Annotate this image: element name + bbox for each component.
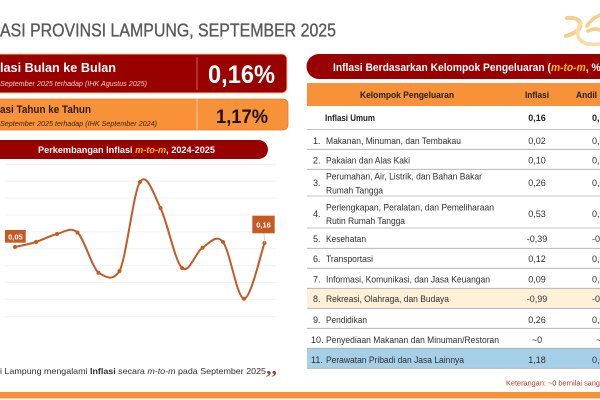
row highlight: recreation <box>307 288 600 308</box>
row 5: Kesehatan <box>326 234 366 244</box>
table header: Andil <box>576 89 597 100</box>
row 5: -0,39 <box>527 234 547 244</box>
row 1: Makanan, Minuman, dan Tembakau <box>326 136 461 146</box>
row 5: 5. <box>313 234 321 244</box>
line chart: monthly inflation <box>5 164 276 316</box>
row 3: 0,26 <box>528 178 546 188</box>
panel: monthly inflation <box>0 54 287 93</box>
row 3: Perumahan, Air, Listrik, dan Bahan Bakar <box>326 172 482 182</box>
table heading <box>306 54 600 79</box>
row 7: 0,09 <box>528 274 546 284</box>
yearly value: 1,17% <box>216 107 268 128</box>
row 8 <box>313 294 600 304</box>
row 11: Perawatan Pribadi dan Jasa Lainnya <box>326 355 464 365</box>
row 2: Pakaian dan Alas Kaki <box>326 156 410 166</box>
yearly heading: asi Tahun ke Tahun <box>0 104 91 116</box>
row 3: 3. <box>313 178 321 188</box>
row 7: Informasi, Komunikasi, dan Jasa Keuangan <box>326 274 490 284</box>
table: expenditure groups <box>307 83 600 368</box>
table header: Kelompok Pengeluaran <box>360 89 454 100</box>
row 7: 7. <box>313 274 321 284</box>
row 6: 0,12 <box>528 254 546 264</box>
row 6: Transportasi <box>326 254 373 264</box>
row 2: 0,10 <box>528 156 546 166</box>
row 9: 0,26 <box>528 315 546 325</box>
row 4: Rutin Rumah Tangga <box>326 216 405 226</box>
data label: first point: 0,05 <box>8 232 23 242</box>
row 2: 2. <box>313 156 321 166</box>
row 2 <box>313 156 600 166</box>
row 11: 11. <box>311 355 323 365</box>
monthly subtitle: September 2025 terhadap (IHK Agustus 2025) <box>0 79 147 88</box>
row 11 <box>311 355 600 365</box>
row 5 <box>313 234 600 244</box>
table header <box>307 83 600 106</box>
table header: Inflasi <box>525 89 549 100</box>
row: general inflation: Inflasi Umum <box>325 113 375 123</box>
monthly value: 0,16% <box>208 61 275 89</box>
row 10: Penyediaan Makanan dan Minuman/Restoran <box>326 335 499 345</box>
title: ASI PROVINSI LAMPUNG, SEPTEMBER 2025 <box>0 20 336 40</box>
chart heading: Perkembangan Inflasi m-to-m, 2024-2025 <box>38 145 215 155</box>
row: general inflation <box>325 113 600 123</box>
row 3 <box>313 172 600 196</box>
table heading: Inflasi Berdasarkan Kelompok Pengeluaran (m-to-m, %) <box>333 62 600 74</box>
row 1: 0,02 <box>528 136 546 146</box>
row 9 <box>313 315 600 325</box>
row 4: 0,53 <box>528 209 546 219</box>
row 9: 9. <box>313 315 321 325</box>
row 10 <box>311 335 600 345</box>
row 4 <box>313 202 600 226</box>
panel: yearly inflation <box>0 99 288 130</box>
icon: logo ornament <box>566 15 600 44</box>
row: general inflation: 0,16 <box>528 113 546 123</box>
row 10: 10. <box>311 335 324 345</box>
row 10: ~0 <box>532 335 542 345</box>
row 8: -0,99 <box>527 294 547 304</box>
data label: last point: 0,16 <box>256 220 271 230</box>
footnote: Keterangan: ~0 bernilai sang <box>506 380 600 388</box>
row 6: 6. <box>313 254 321 264</box>
icon: closing quote: ,, <box>266 358 277 379</box>
row 11: 1,18 <box>528 355 546 365</box>
monthly heading: lasi Bulan ke Bulan <box>0 60 116 75</box>
data label: last point <box>252 216 275 243</box>
row 8: Rekreasi, Olahraga, dan Budaya <box>326 294 449 304</box>
caption: i Lampung mengalami Inflasi secara m-to-m pada September 2025 <box>0 366 266 376</box>
yearly subtitle: September 2025 terhadap (IHK September 2024) <box>0 119 157 128</box>
data label: first point <box>5 230 26 243</box>
footer bar <box>0 392 600 398</box>
row 9: Pendidikan <box>326 315 367 325</box>
row 7 <box>313 274 600 284</box>
row 4: Perlengkapan, Peralatan, dan Pemeliharaan <box>326 202 494 212</box>
row highlight: personal care <box>307 348 600 368</box>
row 1 <box>313 136 600 146</box>
row 4: 4. <box>313 209 321 219</box>
row 1: 1. <box>313 136 321 146</box>
chart heading <box>0 140 268 159</box>
row 3: Rumah Tangga <box>326 186 383 196</box>
row 6 <box>313 254 600 264</box>
row 8: 8. <box>313 294 321 304</box>
